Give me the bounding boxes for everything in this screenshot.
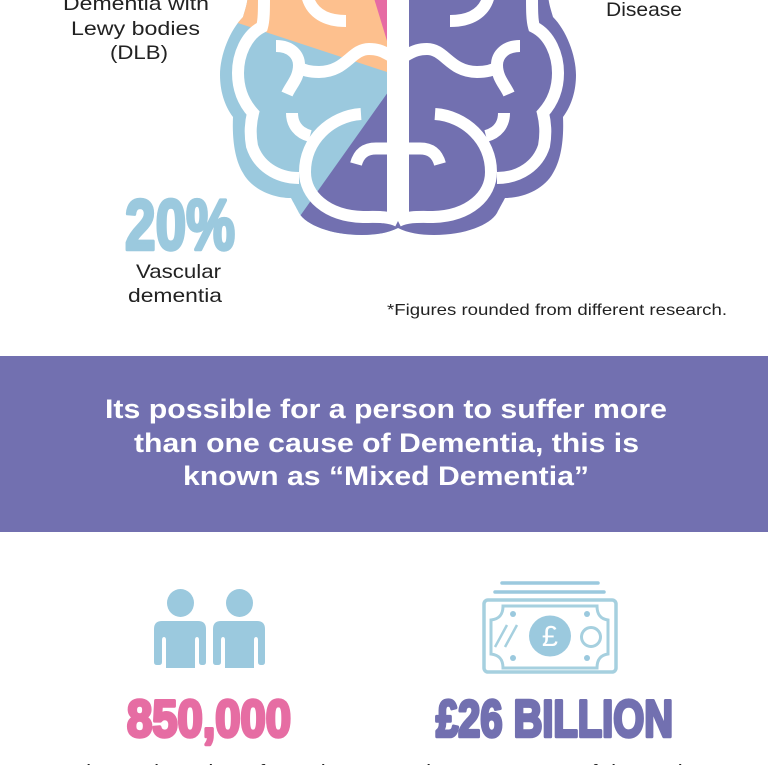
stat: 850,000: 850,000 (127, 690, 291, 748)
brain left half: pie segments (220, 0, 398, 235)
brain right half: Alzheimer's segment (398, 0, 576, 235)
banner text: known as “Mixed Dementia” (183, 461, 589, 491)
banner: mixed dementia (0, 356, 768, 532)
label: Vascular dementia: Vascular (136, 261, 222, 283)
brain outline right (398, 0, 558, 221)
banner text: than one cause of Dementia, this is (134, 428, 639, 458)
icon: two people (154, 589, 265, 668)
label: Dementia with Lewy bodies: (DLB) (110, 42, 168, 64)
icon: pound banknote: £ (542, 621, 558, 653)
banner text (105, 394, 667, 491)
label: Vascular dementia (128, 261, 222, 307)
banner text: Its possible for a person to suffer more (105, 394, 667, 424)
stat: 20 percent: 20% (125, 186, 235, 266)
panel: brain pie chart (200, 0, 576, 240)
brain centre divider (387, 0, 409, 219)
banner background (0, 356, 768, 532)
brain outline left (238, 0, 398, 221)
label: Vascular dementia: dementia (128, 285, 222, 307)
stat: 26 billion pounds: £26 BILLION (436, 690, 673, 748)
footnote: *Figures rounded from different research. (387, 302, 727, 319)
label: Dementia with Lewy bodies (63, 0, 209, 64)
label: Dementia with Lewy bodies: Lewy bodies (71, 18, 200, 40)
icon: pound banknote (484, 583, 616, 672)
